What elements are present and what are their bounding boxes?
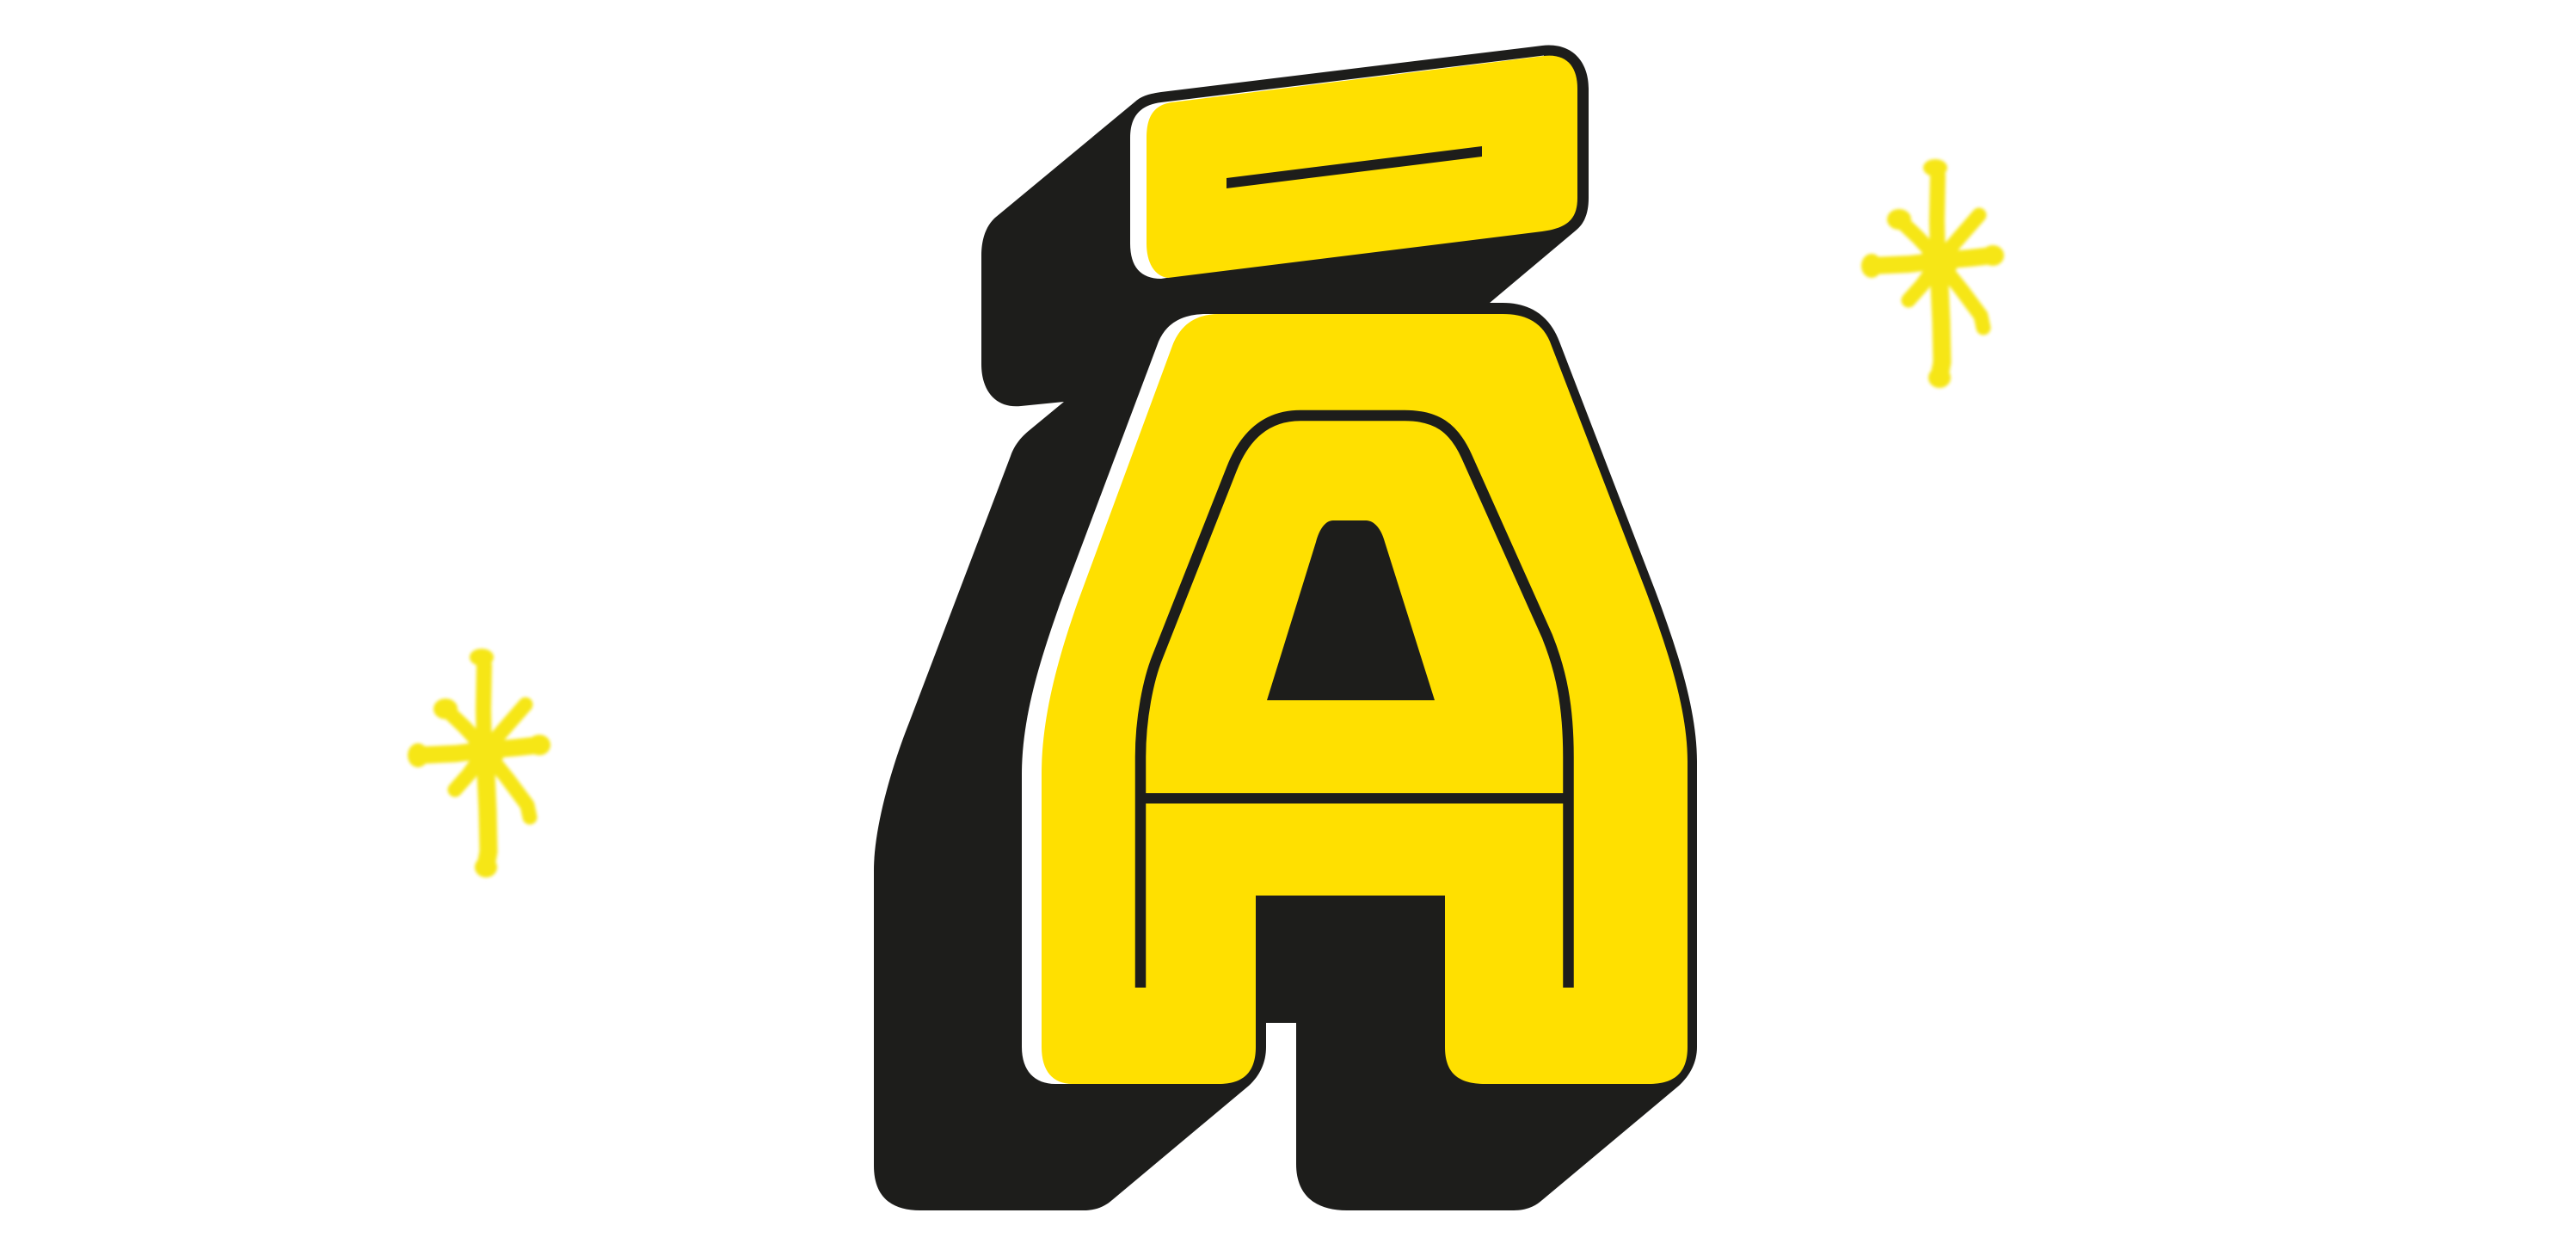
white gap of macron bbox=[1130, 55, 1544, 279]
macron slash bbox=[1227, 146, 1482, 188]
yellow macron bbox=[1147, 56, 1577, 278]
icon: right sparkle bbox=[1861, 159, 2004, 388]
icon: left sparkle bbox=[408, 649, 550, 877]
yellow letter A bbox=[1042, 314, 1688, 1084]
counter of A bbox=[1267, 520, 1435, 700]
black extruded shadow silhouette bbox=[874, 46, 1697, 1210]
white gap of letter A bbox=[1022, 314, 1239, 1084]
inner crossbar of A bbox=[1140, 793, 1568, 803]
inner outline of A bbox=[1140, 416, 1569, 988]
letter A with macron bbox=[874, 46, 1697, 1210]
